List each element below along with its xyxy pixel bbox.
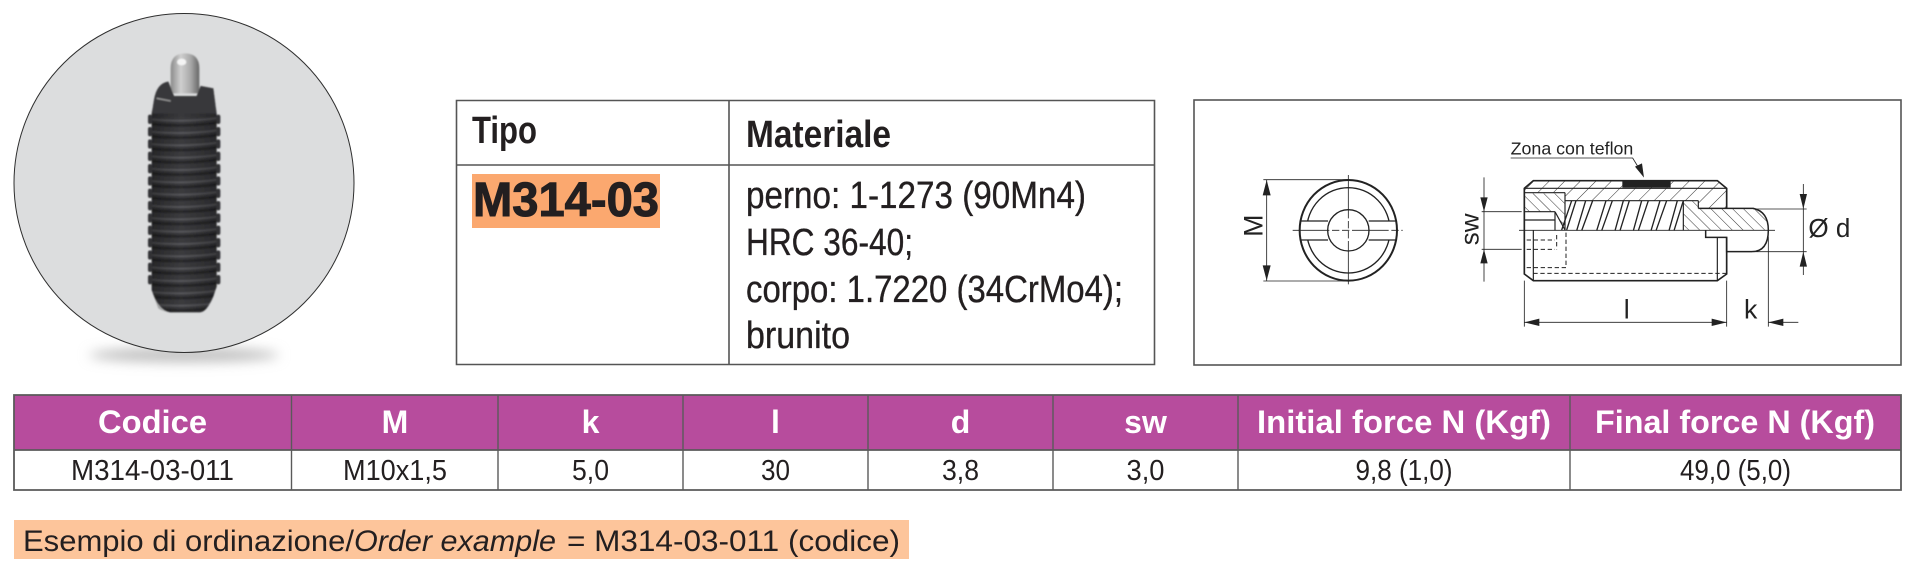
header labels: sw [1124,404,1167,440]
data row: 30 [761,455,790,487]
order example text: Esempio di ordinazione/ [23,525,355,558]
material description: brunito [746,315,850,357]
teflon zone [1622,181,1671,188]
header labels [98,404,1875,440]
data row: 5,0 [572,455,609,487]
panel: product photo [14,14,354,362]
table frame [456,100,1154,364]
order example text: = M314-03-011 (codice) [567,525,900,558]
data row: M10x1,5 [343,455,447,487]
dimension diameter d: Ø d [1808,215,1850,243]
order example highlight [14,520,909,559]
dimension sw: sw [1454,213,1484,245]
material description [746,175,1123,357]
teflon zone label and leader: Zona con teflon [1511,138,1633,158]
table header band [14,395,1901,450]
type code: M314-03 [473,174,659,227]
data row: 3,8 [942,455,979,487]
data row: 3,0 [1126,455,1164,487]
icon: threaded spring plunger [150,53,218,312]
panel: technical drawing [1194,100,1901,365]
body outline [1524,181,1727,281]
photo circle background [14,14,354,352]
header labels: l [771,404,780,440]
drawing frame [1194,100,1901,365]
data row [71,455,1791,487]
hidden lines [1527,232,1727,273]
dimension l [1524,281,1727,327]
dimension k [1744,237,1798,327]
panel: data table [14,395,1901,490]
dimension sw [1454,177,1522,282]
side section view of plunger [1454,138,1850,327]
header labels: M [382,404,408,440]
header labels: Final force N (Kgf) [1595,404,1875,440]
dimension k: k [1744,294,1758,324]
order example text: Order example [354,525,556,558]
hatched pin [1683,201,1768,230]
header labels: k [582,404,600,440]
front view of plunger [1238,175,1403,287]
hatched set screw [1525,193,1565,230]
material description: HRC 36-40; [746,222,913,264]
column dividers [292,395,1570,490]
callout: order example [14,520,909,559]
pin outline [1698,208,1768,252]
spring section [1562,201,1683,231]
header labels: Initial force N (Kgf) [1257,404,1551,440]
heading: Materiale: Materiale [746,114,891,156]
header labels: Codice [98,404,207,440]
heading: Tipo: Tipo [472,110,537,152]
material description: corpo: 1.7220 (34CrMo4); [746,269,1123,311]
data row: 9,8 (1,0) [1356,455,1452,487]
order example text [23,525,900,558]
photo shadow [89,348,279,362]
dimension M: M [1238,215,1268,237]
dimension diameter d [1753,184,1850,275]
dimension M [1238,180,1348,281]
header labels: d [951,404,970,440]
hatched body wall [1525,181,1727,208]
dimension l: l [1624,294,1630,324]
center line [1519,229,1775,232]
panel: type and material table [456,100,1154,364]
material description: perno: 1-1273 (90Mn4) [746,175,1086,217]
data row: 49,0 (5,0) [1680,455,1791,487]
table grid [14,395,1901,490]
teflon zone label and leader [1511,138,1644,178]
type code highlight [472,174,660,228]
data row: M314-03-011 [71,455,234,487]
